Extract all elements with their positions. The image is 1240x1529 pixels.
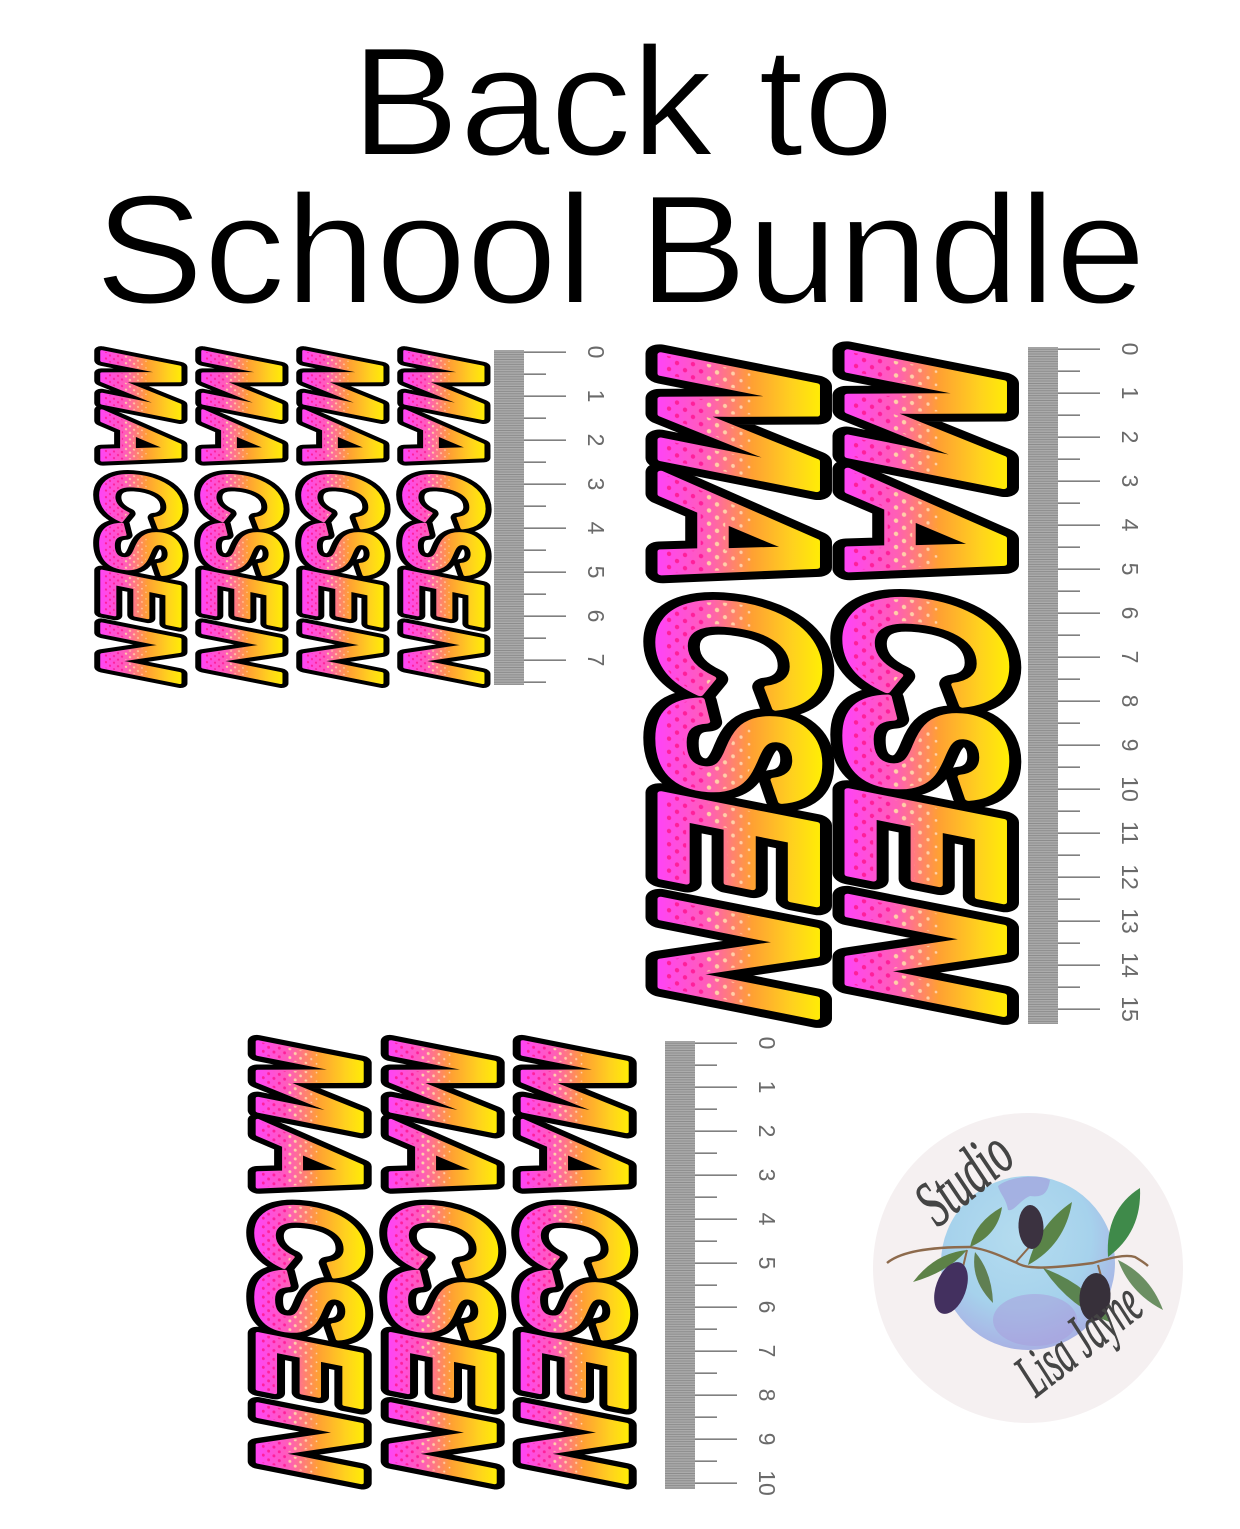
small name 3: MACSEN xyxy=(279,348,405,685)
medium name 3: MACSEN xyxy=(490,1038,657,1485)
medium name 2: MACSEN xyxy=(358,1038,525,1485)
large name 1: MACSEN xyxy=(613,349,866,1021)
large name 1: MACSEN xyxy=(613,349,866,1021)
small name 1: MACSEN xyxy=(77,348,203,685)
small name 2: MACSEN xyxy=(178,348,304,685)
icon: olive branch xyxy=(887,1188,1163,1323)
panel: small name set with ruler xyxy=(77,346,609,685)
ruler: 0 to 15: 0 xyxy=(1117,343,1143,355)
ruler: 0 to 10: 8 xyxy=(754,1389,780,1401)
medium name 1: MACSEN xyxy=(225,1038,392,1485)
ruler: 0 to 7: 2 xyxy=(583,434,609,446)
ruler: 0 to 7: 5 xyxy=(583,566,609,578)
small name 4: MACSEN xyxy=(380,348,506,685)
ruler: 0 to 10: 3 xyxy=(754,1169,780,1181)
ruler: 0 to 15: 11 xyxy=(1117,821,1143,845)
ruler: 0 to 7: 1 xyxy=(583,390,609,402)
panel: large name set with ruler xyxy=(613,343,1143,1024)
ruler: 0 to 7: 3 xyxy=(583,478,609,490)
text: studio: Studio xyxy=(901,1117,1027,1239)
medium name 1: MACSEN xyxy=(225,1038,392,1485)
large name 1: MACSEN xyxy=(613,349,866,1021)
large name 2: MACSEN xyxy=(800,346,1053,1018)
ruler: 0 to 15: 7 xyxy=(1117,651,1143,663)
ruler: 0 to 15: 15 xyxy=(1117,996,1143,1022)
ruler: 0 to 15: 6 xyxy=(1117,607,1143,619)
logo: studio lisa jayne badge xyxy=(873,1113,1183,1423)
ruler: 0 to 7 xyxy=(494,346,609,685)
ruler: 0 to 15 xyxy=(1028,343,1143,1024)
ruler: 0 to 10: 1 xyxy=(754,1081,780,1093)
ruler: 0 to 15: 9 xyxy=(1117,739,1143,751)
large name 2: MACSEN xyxy=(800,346,1053,1018)
small name 1: MACSEN xyxy=(77,348,203,685)
ruler: 0 to 10: 10 xyxy=(754,1470,780,1496)
ruler: 0 to 10: 9 xyxy=(754,1433,780,1445)
ruler: 0 to 15: 10 xyxy=(1117,776,1143,802)
ruler: 0 to 7: 6 xyxy=(583,610,609,622)
small name 3: MACSEN xyxy=(279,348,405,685)
small name 3: MACSEN xyxy=(279,348,405,685)
ruler: 0 to 15: 8 xyxy=(1117,695,1143,707)
medium name 2: MACSEN xyxy=(358,1038,525,1485)
medium name 2: MACSEN xyxy=(358,1038,525,1485)
ruler: 0 to 10: 2 xyxy=(754,1125,780,1137)
icon: olives xyxy=(928,1204,1113,1322)
ruler: 0 to 10: 0 xyxy=(754,1037,780,1049)
small name 2: MACSEN xyxy=(178,348,304,685)
large name 2: MACSEN xyxy=(800,346,1053,1018)
icon: watercolor disc xyxy=(941,1176,1115,1350)
ruler: 0 to 15: 4 xyxy=(1117,519,1143,532)
ruler: 0 to 7: 7 xyxy=(583,654,609,666)
ruler: 0 to 15: 2 xyxy=(1117,431,1143,443)
small name 2: MACSEN xyxy=(178,348,304,685)
ruler: 0 to 10: 6 xyxy=(754,1301,780,1313)
title: Back to xyxy=(351,15,894,188)
ruler: 0 to 15: 3 xyxy=(1117,475,1143,487)
panel: medium name set with ruler xyxy=(225,1037,780,1496)
ruler: 0 to 10: 5 xyxy=(754,1257,780,1269)
medium name 3: MACSEN xyxy=(490,1038,657,1485)
ruler: 0 to 15: 5 xyxy=(1117,563,1143,575)
title xyxy=(95,15,1146,336)
small name 4: MACSEN xyxy=(380,348,506,685)
ruler: 0 to 15: 13 xyxy=(1117,908,1143,934)
ruler: 0 to 7: 4 xyxy=(583,522,609,535)
ruler: 0 to 15: 14 xyxy=(1117,952,1143,978)
ruler: 0 to 15: 12 xyxy=(1117,864,1143,890)
medium name 3: MACSEN xyxy=(490,1038,657,1485)
ruler: 0 to 15: 1 xyxy=(1117,387,1143,399)
ruler: 0 to 10: 7 xyxy=(754,1345,780,1357)
small name 1: MACSEN xyxy=(77,348,203,685)
ruler: 0 to 7: 0 xyxy=(583,346,609,358)
medium name 1: MACSEN xyxy=(225,1038,392,1485)
ruler: 0 to 10: 4 xyxy=(754,1213,780,1226)
ruler: 0 to 10 xyxy=(665,1037,780,1496)
title: School Bundle xyxy=(95,163,1146,336)
small name 4: MACSEN xyxy=(380,348,506,685)
